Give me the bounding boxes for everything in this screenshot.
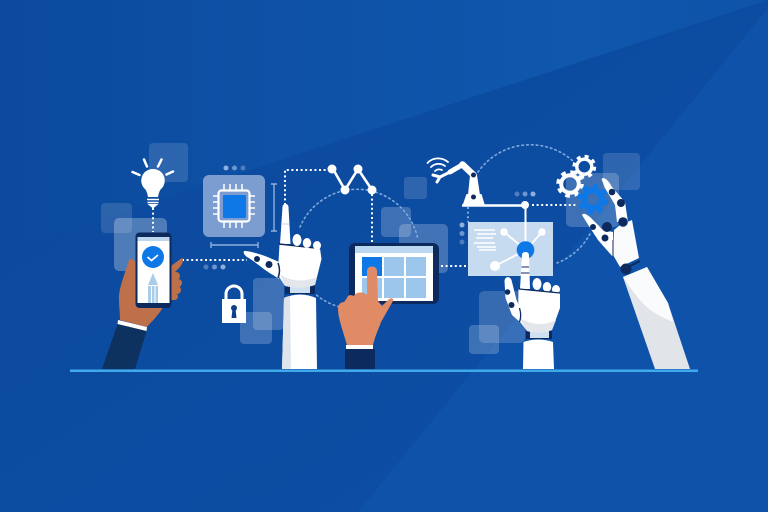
- tablet: [349, 243, 439, 304]
- status dots: [204, 166, 536, 270]
- measure brackets: [211, 184, 277, 248]
- gear: top white: [574, 156, 595, 177]
- robot hand: pointing up, center: [504, 252, 560, 369]
- line chart: [328, 164, 376, 194]
- dotted orbit arcs: [300, 145, 590, 307]
- gear: blue: [579, 186, 606, 213]
- artwork group: [70, 143, 698, 372]
- robot hand: pointing up, left: [244, 204, 322, 369]
- phone: [136, 232, 172, 308]
- gear: left white: [558, 172, 582, 196]
- phone hand: sleeve: [102, 320, 147, 369]
- icon: gears: [558, 156, 606, 213]
- icon: pencil: [148, 273, 158, 303]
- icon: padlock: [222, 286, 246, 323]
- icon: light bulb: [132, 160, 173, 208]
- robot arm: [433, 164, 525, 206]
- tablet hand sleeve: [345, 345, 375, 369]
- hand touching tablet: [338, 266, 393, 345]
- ground line: [70, 370, 698, 372]
- icon: check badge: [142, 246, 164, 268]
- robot arm: right: [582, 178, 690, 369]
- hand holding phone: [119, 258, 183, 327]
- icon: wifi signal: [428, 158, 448, 171]
- translucent tiles: [101, 143, 640, 354]
- icon: microchip tile: [203, 175, 265, 237]
- dotted connectors: [153, 170, 576, 266]
- diagram panel: [468, 201, 553, 276]
